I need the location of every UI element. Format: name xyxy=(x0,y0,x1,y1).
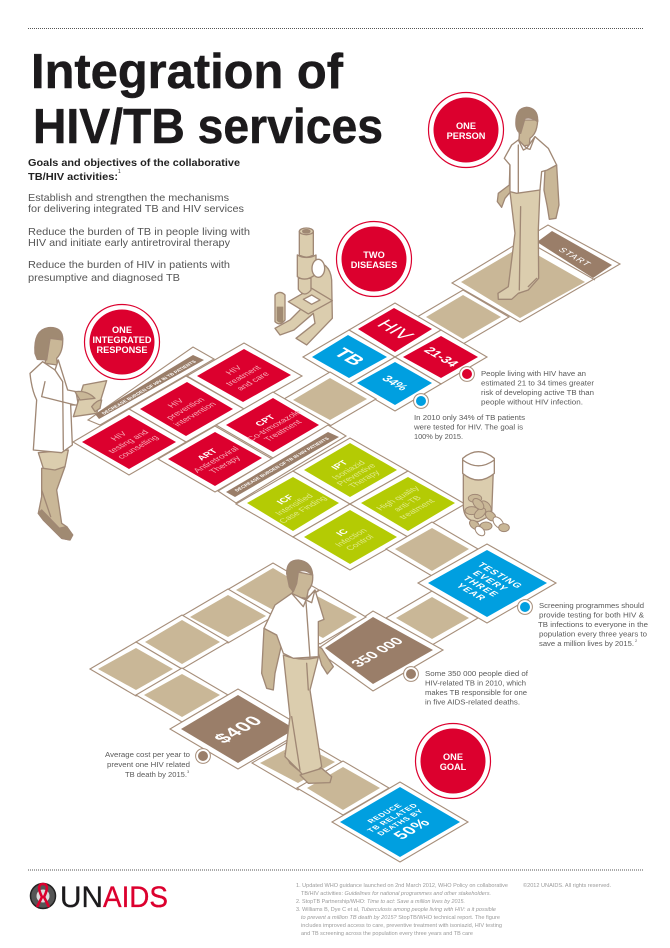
circle: one goal: ONE xyxy=(443,752,463,762)
tile: ART: ART xyxy=(195,447,220,462)
goals list: Establish and strengthen the mechanisms xyxy=(28,193,229,204)
tile: TB xyxy=(303,330,395,384)
tile: 350 000 xyxy=(316,611,443,691)
title xyxy=(31,45,383,154)
callout text: screening programmes: 2 xyxy=(635,638,638,643)
circle: two diseases: TWO xyxy=(363,250,385,260)
tiles: path upper loop xyxy=(90,563,366,722)
tile: HIV prevention intervention: HIV xyxy=(165,397,186,409)
tile: $400: $400 xyxy=(210,713,269,747)
tile: IPT: Therapy xyxy=(346,468,383,489)
footnotes: TB/HIV activities: Guidelines for national programmes and other stakeholders. xyxy=(301,891,491,897)
footnotes: 2. StopTB Partnership/WHO: Time to act: Save a million lives by 2015. xyxy=(296,899,465,905)
title: HIV/TB services xyxy=(33,100,383,154)
tile: reduce TB related deaths by 50%: DEATHS BY xyxy=(375,808,426,837)
tile: ART: Antiretroviral xyxy=(191,445,241,474)
circle: two diseases xyxy=(336,222,412,296)
tile: CPT: Co-trimoxazole xyxy=(244,408,303,442)
callout text: TB patients tested: In 2010 only 34% of TB patients xyxy=(414,413,525,422)
tile: HIV prevention intervention: intervention xyxy=(171,400,219,428)
callout text: people living with HIV: risk of developing active TB than xyxy=(481,388,594,397)
callout text: screening programmes: save a million lives by 2015. xyxy=(539,639,634,648)
tile: ICF: ICF xyxy=(274,493,296,506)
tile: HIV treatment and care: treatment xyxy=(223,364,264,387)
footnotes xyxy=(296,883,508,937)
tile: ART: Therapy xyxy=(207,454,243,475)
callout text: average cost: 3 xyxy=(187,769,190,774)
callout marker: HIV xyxy=(460,367,474,381)
callout text: people living with HIV: people without HIV infection. xyxy=(481,398,583,406)
tile: HIV testing and counselling: testing and xyxy=(106,428,151,454)
tile: 34%: 34% xyxy=(378,374,412,393)
tile: reduce TB related deaths by 50%: TB RELATED xyxy=(365,802,420,834)
callout text: 350 000 deaths: HIV-related TB in 2010, which xyxy=(425,678,526,688)
circle: two diseases: DISEASES xyxy=(351,260,397,270)
copyright: ©2012 UNAIDS. All rights reserved. xyxy=(523,882,611,889)
callout text: average cost: prevent one HIV related xyxy=(107,760,190,769)
goals list: presumptive and diagnosed TB xyxy=(28,273,180,284)
goals list: for delivering integrated TB and HIV services xyxy=(28,204,244,215)
tile: testing every three year: EVERY xyxy=(470,569,512,593)
title: Integration of xyxy=(31,45,344,99)
figure: woman doctor xyxy=(30,328,107,540)
tile: 350 000: 350 000 xyxy=(348,635,408,670)
callout text: TB patients tested: were tested for HIV. The goal is xyxy=(413,422,523,432)
circle: one goal xyxy=(416,724,490,798)
callout marker: $400 xyxy=(196,749,210,763)
goals heading xyxy=(28,158,241,183)
tile: high quality anti-TB treatment: anti-TB xyxy=(391,494,424,513)
callout text: people living with HIV: estimated 21 to 34 times greater xyxy=(481,378,594,388)
circle: one integrated response: ONE xyxy=(112,325,132,335)
tile: HIV: HIV xyxy=(372,317,418,344)
tile: IPT: Preventive xyxy=(334,462,378,487)
callout text: average cost: Average cost per year to xyxy=(105,750,190,759)
tile: IC xyxy=(293,504,408,570)
tile: HIV xyxy=(349,303,441,357)
circle: one person: PERSON xyxy=(447,131,486,141)
callout text: average cost: TB death by 2015. xyxy=(125,770,187,779)
footnotes: 3. Williams B, Dye C et al, Tuberculosis among people living with HIV: a it possible xyxy=(296,907,496,913)
tile: HIV testing and counselling: counselling xyxy=(115,434,161,460)
tile: HIV treatment and care: HIV xyxy=(223,364,244,376)
tile: IPT: IPT xyxy=(329,459,350,471)
callout text: screening programmes: Screening programmes should xyxy=(539,601,644,610)
tile: TB: TB xyxy=(328,346,369,369)
tile: testing every three year xyxy=(418,544,556,623)
callout text: average cost xyxy=(105,750,190,779)
tile: 34% xyxy=(349,357,441,411)
icon: pill bottle xyxy=(463,452,509,538)
tile: HIV testing and counselling: HIV xyxy=(108,430,129,442)
tile: high quality anti-TB treatment: treatment xyxy=(397,497,437,521)
callout marker: 350 000 xyxy=(404,667,418,681)
tile: ICF: Intensified xyxy=(273,492,315,517)
footnotes: includes improved access to care, preventive treatment with isoniazid, HIV testing xyxy=(301,923,502,929)
circle: one goal: GOAL xyxy=(440,762,467,772)
circle: one person: ONE xyxy=(456,121,476,131)
circle: one integrated response: RESPONSE xyxy=(96,345,148,355)
strip: decrease burden of TB in HIV patients: DECREASE BURDEN OF TB IN HIV PATIENTS xyxy=(234,436,332,493)
tile: HIV treatment and care: and care xyxy=(234,370,272,392)
callout text: screening programmes xyxy=(538,601,648,648)
callout text: screening programmes: TB infections to everyone in the xyxy=(538,620,648,629)
callout marker: TB xyxy=(414,394,428,408)
tile: ICF: Case Finding xyxy=(276,494,329,525)
tile: HIV prevention intervention xyxy=(129,376,244,442)
tile: HIV treatment and care xyxy=(187,343,302,409)
tile: 21-34 xyxy=(395,330,487,384)
goals list: HIV and initiate early antiretroviral therapy xyxy=(28,238,231,249)
callout text: screening programmes: provide testing for both HIV & xyxy=(539,610,644,620)
tile: CPT: CPT xyxy=(253,413,278,428)
callout text: TB patients tested: 100% by 2015. xyxy=(414,432,463,441)
tile: 21-34: 21-34 xyxy=(420,345,463,369)
circle: one person xyxy=(428,92,504,168)
tile: IC: Infection xyxy=(332,527,370,548)
callout text: people living with HIV xyxy=(481,369,594,406)
callout text: 350 000 deaths xyxy=(425,669,529,706)
goals heading: TB/HIV activities: xyxy=(28,172,118,183)
figure: man at start xyxy=(497,107,559,299)
circle: one integrated response xyxy=(84,304,160,380)
tile: reduce TB related deaths by 50%: REDUCE xyxy=(365,802,404,825)
tile: start: START xyxy=(556,246,594,268)
tile: ART xyxy=(158,426,272,492)
strip: decrease burden of HIV in TB patients: DECREASE BURDEN OF HIV IN TB PATIENTS xyxy=(101,359,199,416)
tile: testing every three year: YEAR xyxy=(454,581,490,602)
tile: start xyxy=(452,225,620,322)
strip: decrease burden of HIV in TB patients xyxy=(88,347,214,425)
tile: CPT: Treatment xyxy=(261,418,304,443)
tile: testing every three year: TESTING xyxy=(475,561,526,590)
callout text: people living with HIV: People living with HIV have an xyxy=(481,369,586,378)
footnotes: 1. Updated WHO guidance launched on 2nd March 2012, WHO Policy on collaborative xyxy=(296,883,508,889)
tile: CPT xyxy=(216,392,330,458)
tile: path above 350 000 xyxy=(386,591,478,645)
tile: HIV testing and counselling xyxy=(73,409,186,475)
tile: high quality anti-TB treatment: High quality xyxy=(374,484,422,512)
goals heading: Goals and objectives of the collaborative xyxy=(28,158,241,169)
callout text: 350 000 deaths: in five AIDS-related deaths. xyxy=(425,698,520,706)
goals list: Reduce the burden of TB in people living with xyxy=(28,227,250,238)
logo: UNAIDS: AIDS xyxy=(103,881,168,914)
tile: path left of TB xyxy=(284,372,376,426)
logo: UNAIDS xyxy=(30,881,168,914)
callout text: 350 000 deaths: makes TB responsible for one xyxy=(425,688,527,697)
figure: man on path xyxy=(262,560,333,783)
tile: IPT: Isoniazid xyxy=(329,459,368,481)
tiles: path lower xyxy=(252,736,389,815)
circle: one integrated response: INTEGRATED xyxy=(92,335,152,345)
strip: decrease burden of TB in HIV patients xyxy=(218,425,346,503)
tile: IC: IC xyxy=(334,528,351,537)
tile: IC: Control xyxy=(343,533,376,552)
tile: path xyxy=(417,290,509,344)
callout text: TB patients tested xyxy=(413,413,525,441)
tile: testing every three year: THREE xyxy=(461,574,502,598)
tile: reduce TB related deaths by 50%: 50% xyxy=(390,816,435,842)
logo: UNAIDS: UN xyxy=(60,881,103,914)
callout text: 350 000 deaths: Some 350 000 people died of xyxy=(425,669,529,678)
footnotes: to prevent a million TB death by 2015? StopTB/WHO technical report. The figure xyxy=(301,915,500,921)
icon: microscope xyxy=(275,228,332,345)
goals heading: 1 xyxy=(118,169,121,175)
tile: ICF xyxy=(236,471,350,537)
tile: IPT xyxy=(293,438,408,504)
footnotes: and TB screening across the population every three years and TB care xyxy=(301,931,473,937)
goals list xyxy=(28,193,250,284)
tile: HIV prevention intervention: prevention xyxy=(163,396,207,421)
tile: reduce TB related deaths by 50% xyxy=(332,782,468,862)
tile: $400 xyxy=(170,689,306,769)
callout text: screening programmes: population every three years to xyxy=(539,630,647,638)
goals list: Reduce the burden of HIV in patients with xyxy=(28,260,230,271)
tile: path below treatment xyxy=(386,522,478,576)
tile: high quality anti-TB treatment xyxy=(350,471,465,537)
callout marker: testing xyxy=(518,600,532,614)
